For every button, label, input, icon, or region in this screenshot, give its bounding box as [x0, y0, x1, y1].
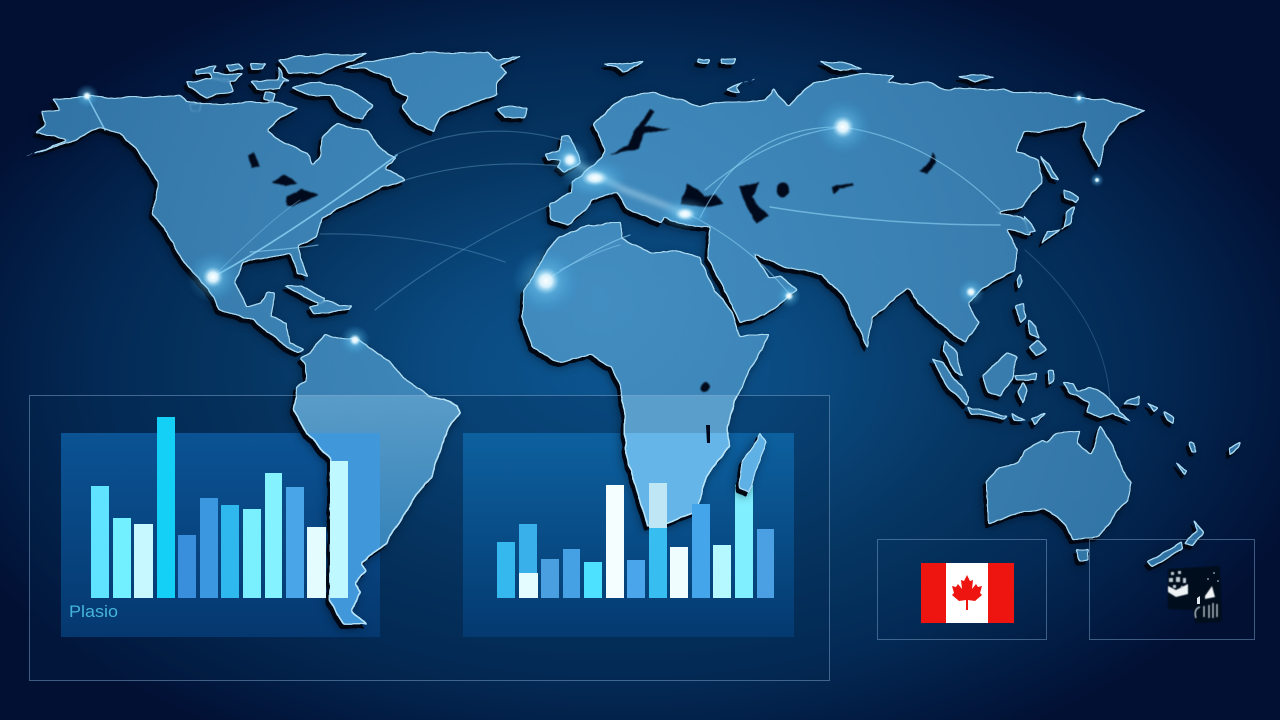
- world map: [22, 52, 1240, 625]
- sea: Caspian: [738, 182, 769, 223]
- panel outline: chart container: [30, 396, 830, 680]
- lakes: North America: [248, 152, 319, 206]
- node: Oman: [777, 284, 801, 308]
- node: Europe: [561, 158, 629, 198]
- islands: South-East Asia: [932, 273, 1140, 424]
- node: Turkey: [659, 197, 711, 231]
- island: New Zealand: [1147, 520, 1204, 568]
- islands: Caribbean: [285, 286, 352, 313]
- node: Alaska: [75, 84, 99, 108]
- continent: South America: [293, 335, 460, 625]
- islands: Pacific: [1147, 402, 1240, 475]
- flag: Canada: [921, 563, 1014, 623]
- sea: Baltic: [610, 110, 670, 154]
- glow beam: Europe: [565, 158, 690, 215]
- node: Russia: [815, 99, 871, 155]
- sea: Black Sea: [680, 183, 724, 207]
- island: Iceland: [497, 107, 527, 119]
- connection lines: [87, 96, 1110, 400]
- node: United Kingdom: [550, 140, 590, 180]
- panel: Canada flag box: [878, 540, 1046, 640]
- lake: Malawi: [706, 425, 710, 443]
- land highlight in right chart panel: [625, 433, 729, 525]
- icon: maple leaf: [952, 575, 982, 610]
- panel: right chart background: [463, 433, 794, 637]
- lake: Aral: [776, 182, 790, 198]
- land highlight in left chart panel: [306, 433, 380, 624]
- node: Japan: [1090, 173, 1104, 187]
- continent: Eurasia: [549, 72, 1146, 348]
- island: Australia: [987, 425, 1130, 540]
- panel: left chart background: [61, 433, 380, 637]
- islands: Arctic Eurasia: [602, 58, 995, 93]
- node: Venezuela: [340, 325, 370, 355]
- node: Far East: [1071, 90, 1087, 106]
- lake: Balkhash: [831, 182, 853, 194]
- chart label: Plasio: [69, 602, 118, 621]
- node: West Africa: [512, 247, 580, 315]
- icon: distorted emblem: [1168, 566, 1222, 623]
- lake: Baikal: [919, 152, 936, 173]
- node: Mexico: [187, 251, 239, 303]
- left bar chart: [91, 417, 348, 598]
- continent: Africa: [522, 223, 769, 527]
- glow nodes: [75, 84, 1104, 355]
- node: Hong Kong: [957, 278, 985, 306]
- right bar chart: [497, 483, 774, 598]
- continent: Canadian Arctic islands: [185, 53, 373, 120]
- continent: North America: [22, 95, 405, 353]
- land tint inside outer panel: [293, 395, 738, 621]
- islands: United Kingdom: [544, 137, 581, 173]
- island: Madagascar: [738, 433, 766, 492]
- panel: emblem box: [1090, 540, 1254, 640]
- island: Tasmania: [1077, 549, 1089, 562]
- continent: Greenland: [345, 52, 520, 132]
- panel: chart container: [30, 396, 830, 680]
- islands: Japan and Sakhalin: [1024, 155, 1079, 243]
- lake: Victoria: [700, 382, 710, 392]
